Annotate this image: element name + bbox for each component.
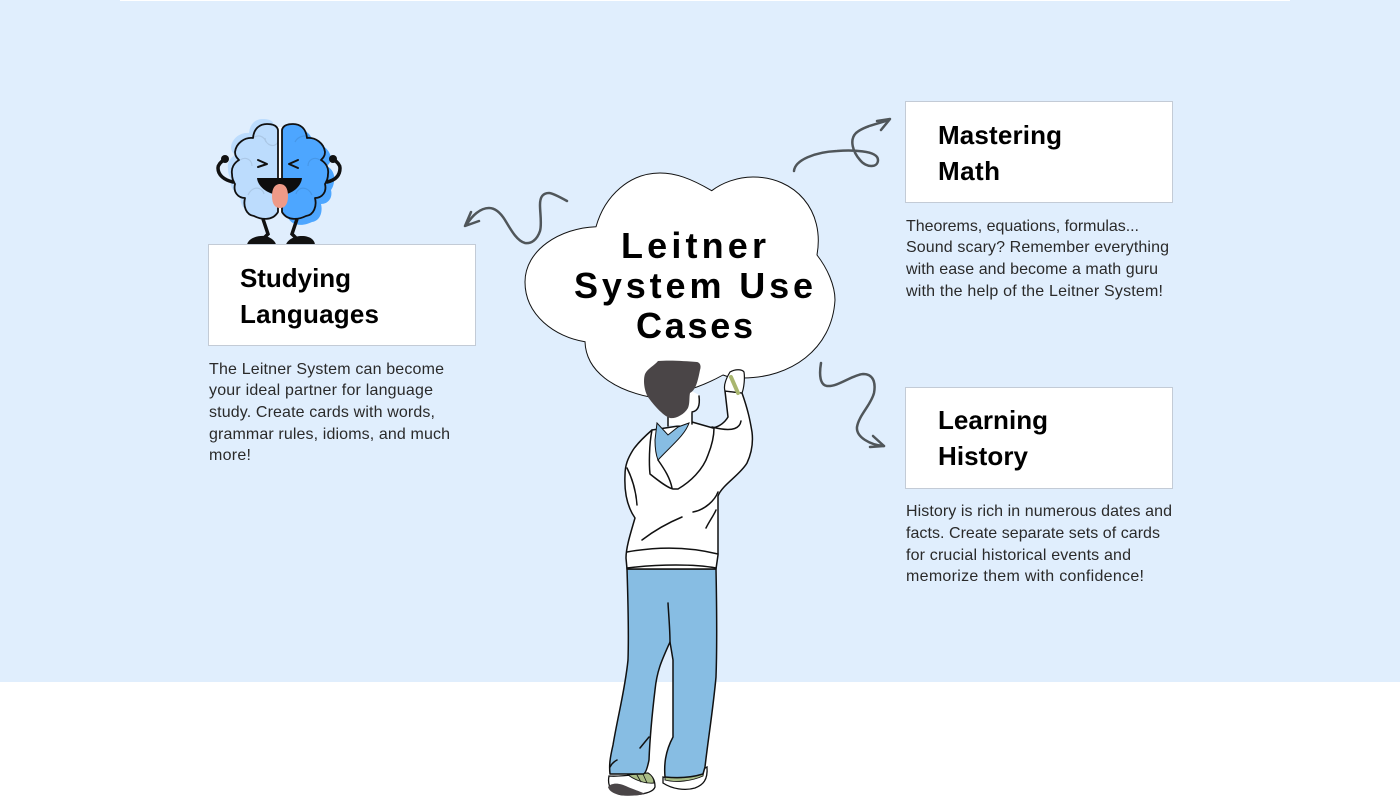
heading: learning history: Learning xyxy=(938,405,1048,435)
neck and ear xyxy=(668,390,699,426)
arrow: to learning history xyxy=(820,363,884,447)
hair xyxy=(644,361,701,418)
eyes xyxy=(258,160,298,168)
cloud with title xyxy=(525,173,835,397)
heading: studying languages xyxy=(240,263,379,329)
hand xyxy=(724,370,744,393)
hoodie xyxy=(625,391,752,569)
text: studying languages: more! xyxy=(209,447,251,464)
text: studying languages xyxy=(209,361,450,464)
arms xyxy=(218,159,340,182)
title: System Use xyxy=(574,265,813,306)
brain shadow blobs xyxy=(228,119,274,214)
text: mastering math: Theorems, equations, formulas... xyxy=(906,218,1139,235)
legs and feet xyxy=(261,219,299,241)
person writing on the cloud xyxy=(608,361,752,796)
arm and sleeve folds xyxy=(627,421,741,540)
text: mastering math xyxy=(905,218,1169,300)
text: mastering math: Sound scary? Remember everything xyxy=(906,239,1169,256)
card: studying languages xyxy=(208,244,476,346)
heading: mastering math xyxy=(938,120,1062,186)
title xyxy=(574,225,813,346)
heading: mastering math: Math xyxy=(938,156,1000,186)
title: Cases xyxy=(636,305,753,346)
text: learning history xyxy=(906,503,1172,585)
text: learning history: memorize them with confidence! xyxy=(906,568,1144,585)
left lobe xyxy=(232,124,278,219)
heading: learning history xyxy=(938,405,1048,471)
text: mastering math: with ease and become a math guru xyxy=(905,261,1158,278)
text: mastering math: with the help of the Leitner System! xyxy=(905,283,1163,300)
heading: studying languages: Languages xyxy=(240,299,379,329)
text: studying languages: study. Create cards with words, xyxy=(209,404,435,421)
title: Leitner xyxy=(621,225,766,266)
text: learning history: History is rich in numerous dates and xyxy=(906,503,1172,520)
card: learning history xyxy=(906,388,1172,488)
hem xyxy=(627,548,718,554)
collar xyxy=(655,423,689,460)
arrow: to studying languages xyxy=(465,193,567,243)
heading: learning history: History xyxy=(938,441,1029,471)
heading: studying languages: Studying xyxy=(240,263,351,293)
shoes xyxy=(608,767,707,796)
mouth xyxy=(257,178,302,195)
right lobe xyxy=(282,124,328,219)
brain folds xyxy=(240,136,320,195)
arrow: to mastering math xyxy=(794,119,890,171)
icon: brain mascot xyxy=(218,119,340,245)
text: learning history: for crucial historical events and xyxy=(906,547,1131,564)
hood xyxy=(649,428,714,489)
text: studying languages: The Leitner System can become xyxy=(209,361,444,378)
text: learning history: facts. Create separate sets of cards xyxy=(906,525,1160,542)
pen xyxy=(731,377,738,393)
pants xyxy=(610,569,717,778)
text: studying languages: your ideal partner for language xyxy=(209,382,433,399)
heading: mastering math: Mastering xyxy=(938,120,1062,150)
tongue xyxy=(272,184,288,208)
text: studying languages: grammar rules, idioms, and much xyxy=(209,426,450,443)
card: mastering math xyxy=(906,102,1172,202)
